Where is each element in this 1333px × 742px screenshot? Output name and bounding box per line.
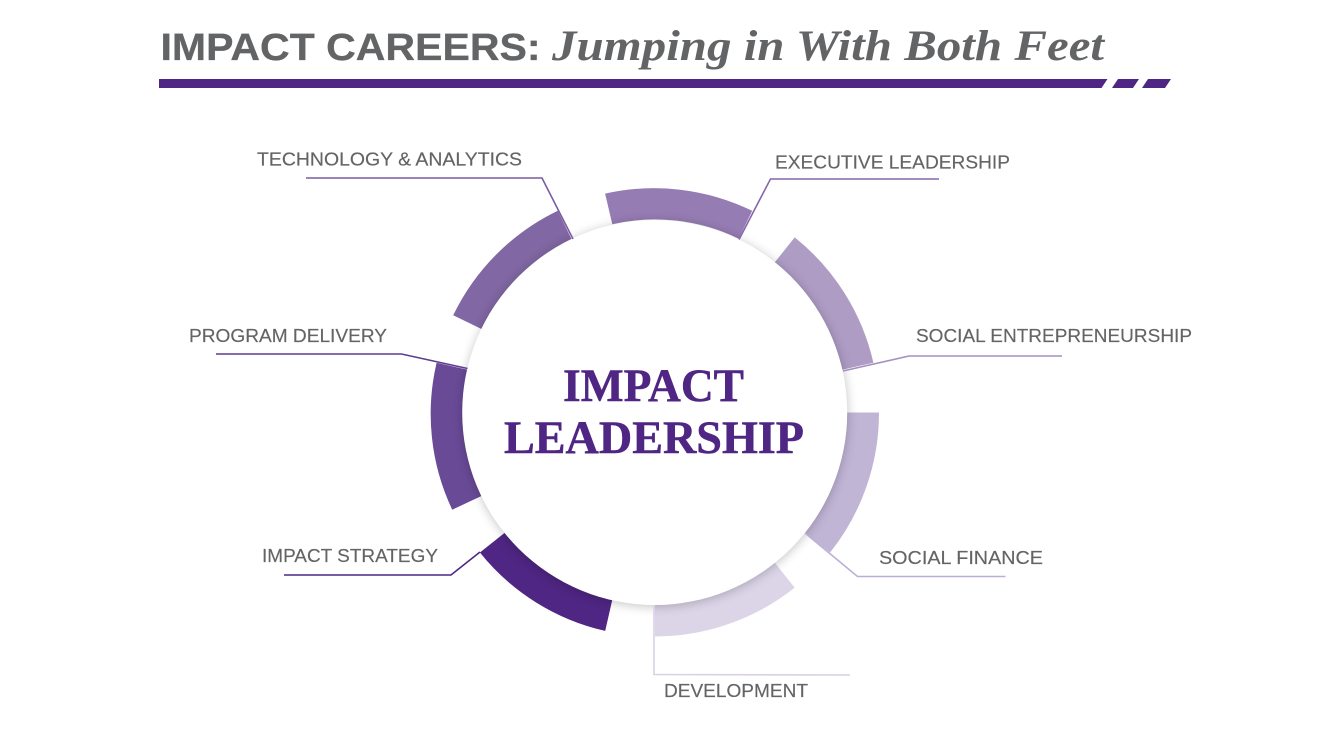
label: executive leadership: EXECUTIVE LEADERSHIP [775, 152, 1010, 172]
label: impact strategy [262, 546, 480, 575]
title: IMPACT CAREERS: [160, 27, 540, 69]
label: development [654, 605, 850, 701]
centre heading: IMPACT [563, 360, 744, 412]
segment: executive leadership [605, 188, 752, 239]
label: social entrepreneurship: SOCIAL ENTREPRENEURSHIP [916, 326, 1192, 346]
segment: impact strategy [480, 533, 612, 631]
title: Jumping in With Both Feet [551, 23, 1106, 70]
label: social finance: SOCIAL FINANCE [879, 548, 1043, 568]
label: technology and analytics [257, 150, 573, 239]
label: program delivery [189, 326, 468, 368]
segment: social finance [805, 412, 879, 552]
segment: program delivery [431, 363, 482, 510]
label: social finance [805, 533, 1043, 576]
label: program delivery: PROGRAM DELIVERY [189, 326, 387, 346]
centre circle shadow [463, 222, 847, 606]
label: development: DEVELOPMENT [664, 681, 808, 701]
segment: development [655, 563, 795, 636]
centre heading [504, 360, 804, 464]
label: technology and analytics: TECHNOLOGY & ANALYTICS [257, 150, 522, 170]
title [160, 23, 1106, 70]
ring diagram [431, 188, 879, 636]
segment: social entrepreneurship [775, 237, 873, 370]
centre heading: LEADERSHIP [504, 412, 804, 464]
segment: technology and analytics [453, 211, 572, 329]
centre circle [462, 220, 847, 605]
label: social entrepreneurship [843, 326, 1192, 371]
label: impact strategy: IMPACT STRATEGY [262, 546, 438, 566]
title rule with dashes [159, 79, 1171, 88]
label: executive leadership [739, 152, 1010, 240]
